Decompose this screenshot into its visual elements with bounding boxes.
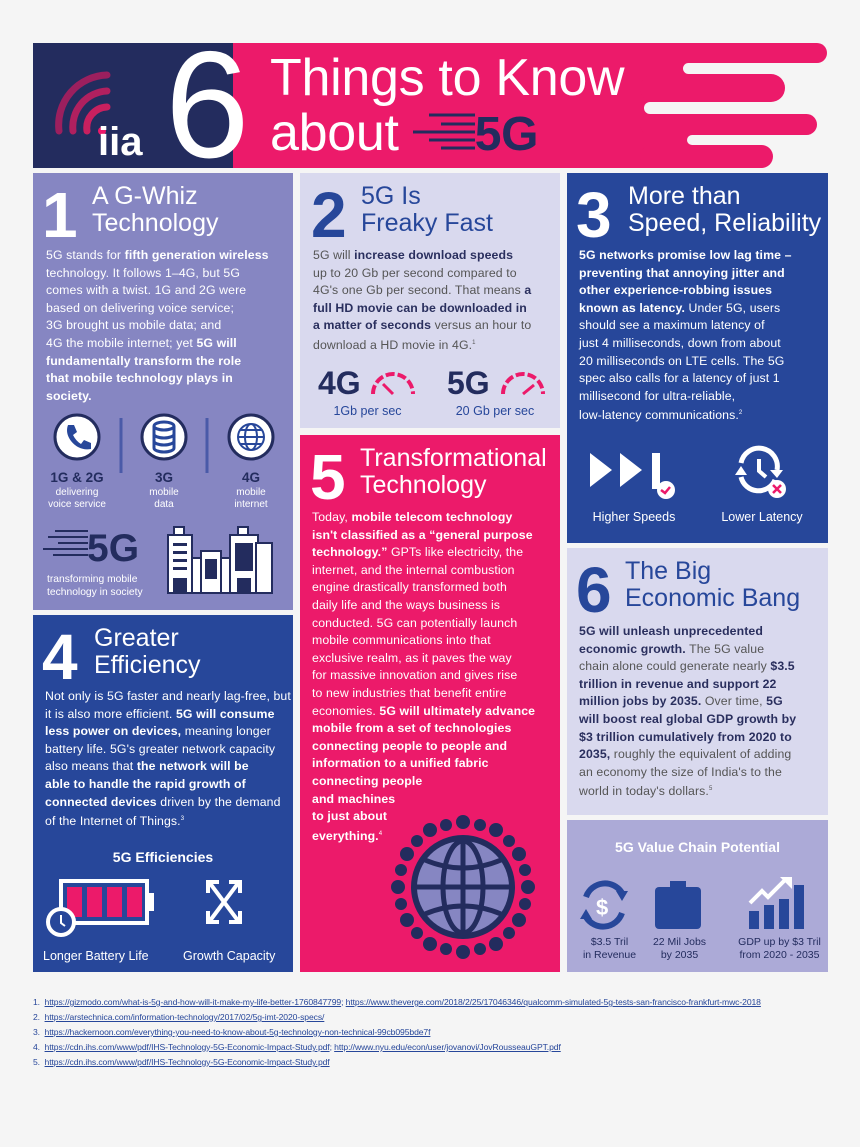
heading 2: 5G Is [361, 182, 421, 210]
heading 4: Efficiency [94, 651, 201, 679]
text block 2: 4G's one Gb per second. That means a [313, 283, 531, 297]
icon: globe with people [391, 815, 535, 959]
text block 3 [578, 248, 792, 422]
heading 6: 6 [576, 554, 612, 626]
heading 2: 2 [311, 179, 347, 251]
panel 4: Greater Efficiency [33, 615, 293, 972]
text block 3: should see a maximum latency of [579, 318, 765, 332]
heading 1: A G-Whiz [92, 182, 198, 210]
title: Things to Know [270, 49, 624, 107]
text block 2: full HD movie can be downloaded in [313, 301, 527, 315]
heading 2: Freaky Fast [361, 209, 493, 237]
footnotes: 3. https://hackernoon.com/everything-you-need-to-know-about-5g-technology-non-technical-99cb095bde7f [33, 1027, 430, 1037]
heading 3 [576, 179, 822, 251]
text block 5: daily life and the ways business is [312, 598, 500, 612]
text block 3: 20 milliseconds on LTE cells. The 5G [579, 354, 784, 368]
heading 6: The Big [625, 557, 711, 585]
value chain icons [580, 877, 821, 961]
icons row: generations: 3G [155, 470, 173, 485]
panel 5: Transformational [300, 435, 560, 972]
text block 3: preventing that annoying jitter and [579, 266, 785, 280]
icons row: generations: 4G [242, 470, 260, 485]
footnotes: 5. https://cdn.ihs.com/www/pdf/IHS-Technology-5G-Economic-Impact-Study.pdf [33, 1057, 330, 1067]
text block 5: technology.” GPTs like electricity, the [312, 545, 523, 559]
text block 6: chain alone could generate nearly $3.5 [579, 659, 795, 673]
text block 6: an economy the size of India's to the [579, 765, 782, 779]
speed gauges: 4G [318, 365, 361, 401]
5G transforming + city icon: 5G [87, 527, 139, 570]
text block 3: low-latency communications.2 [579, 408, 742, 422]
icons row: generations: data [154, 499, 174, 510]
text block 4: Not only is 5G faster and nearly lag-free, but [45, 689, 291, 703]
text block 6: economic growth. The 5G value [579, 642, 764, 656]
text block 5: mobile from a set of technologies [312, 721, 511, 735]
text block 4: battery life. 5G's greater network capacity [45, 742, 275, 756]
value chain icons: in Revenue [583, 949, 636, 961]
text block 5: mobile communications into that [312, 633, 491, 647]
text block 6: trillion in revenue and support 22 [579, 677, 776, 691]
heading 1 [42, 179, 218, 251]
title [270, 49, 625, 162]
speed gauges: 5G [447, 365, 490, 401]
icons row: generations: 1G & 2G [50, 470, 104, 485]
icons: higher speeds / lower latency: Higher Speeds [593, 510, 675, 524]
heading 4: 4 [42, 621, 78, 693]
icons row: generations: voice service [48, 499, 106, 510]
icons: higher speeds / lower latency [590, 446, 803, 524]
icons: battery & growth [43, 879, 276, 963]
text block 6: will boost real global GDP growth by [579, 712, 796, 726]
text block 5: everything.4 [312, 829, 382, 843]
text block 4: also means that the network will be [45, 759, 249, 773]
logo: iia wifi [55, 72, 143, 157]
text block 5: Today, mobile telecom technology [312, 510, 512, 524]
speed gauges [318, 365, 545, 418]
text block 5: economies. 5G will ultimately advance [312, 704, 535, 718]
heading 6 [576, 554, 800, 626]
text block 3: known as latency. Under 5G, users [579, 301, 780, 315]
heading 4 [42, 621, 201, 693]
heading 3: 3 [576, 179, 612, 251]
footnotes: 1. https://gizmodo.com/what-is-5g-and-how-will-it-make-my-life-better-1760847799; https://www.theverge.com/2018/2/25/17046346/qualcomm-simulated-5g-tests-san-francisco-frankfurt-mwc-2018 [33, 997, 761, 1007]
heading 3: Speed, Reliability [628, 209, 821, 237]
text block 1: comes with a twist. 1G and 2G were [46, 283, 246, 297]
text block 4: less power on devices, meaning longer [45, 724, 271, 738]
text block 2: download a HD movie in 4G.1 [313, 338, 476, 352]
heading 3: More than [628, 182, 741, 210]
icons: higher speeds / lower latency: Lower Latency [721, 510, 803, 524]
text block 5: exclusive realm, as it paves the way [312, 651, 512, 665]
panel: value chain [567, 820, 828, 972]
icons row: generations [48, 414, 274, 510]
heading 4: Greater [94, 624, 179, 652]
text block 3: just 4 milliseconds, down from about [579, 336, 781, 350]
text block 5: conducted. 5G can potentially launch [312, 616, 517, 630]
5G transforming + city icon [43, 526, 273, 598]
value chain icons: from 2020 - 2035 [740, 949, 819, 961]
text block 4: connected devices driven by the demand [45, 795, 281, 809]
text block 5: to just about [312, 809, 387, 823]
footnotes [33, 997, 761, 1067]
value chain icons: GDP up by $3 Tril [738, 936, 821, 948]
value chain heading: 5G Value Chain Potential [615, 839, 780, 855]
text block 1: that mobile technology plays in [46, 371, 233, 385]
text block 1: society. [46, 389, 92, 403]
text block 4 [45, 689, 291, 828]
big 6: 6 [165, 20, 246, 190]
text block 6: million jobs by 2035. Over time, 5G [579, 694, 783, 708]
panel 6: Economic Bang [567, 548, 828, 815]
text block 5: connecting people [312, 774, 422, 788]
icons row: generations: mobile [149, 487, 179, 498]
text block 5: engine drastically transformed both [312, 580, 507, 594]
text block 3: 5G networks promise low lag time – [579, 248, 792, 262]
text block 5 [312, 510, 535, 843]
text block 5: connecting people to people and [312, 739, 507, 753]
heading 5: Technology [360, 471, 486, 499]
text block 6: world in today's dollars.5 [579, 784, 712, 798]
value chain icons: $3.5 Tril [591, 936, 628, 948]
heading 2 [311, 179, 493, 251]
5G efficiencies heading: 5G Efficiencies [113, 849, 213, 865]
icons: battery & growth: Growth Capacity [183, 949, 275, 963]
text block 1: technology. It follows 1–4G, but 5G [46, 266, 240, 280]
text block 6 [579, 624, 796, 798]
heading 5 [310, 441, 547, 513]
text block 1: 3G brought us mobile data; and [46, 318, 221, 332]
5G transforming + city icon: technology in society [47, 586, 143, 598]
heading 5: 5 [310, 441, 346, 513]
icons row: generations: internet [234, 499, 268, 510]
text block 2: 5G will increase download speeds [313, 248, 513, 262]
text block 2: a matter of seconds versus an hour to [313, 318, 531, 332]
text block 5: internet, and the internal combustion [312, 563, 515, 577]
text block 5: for massive innovation and gives rise [312, 668, 517, 682]
speed gauges: 1Gb per sec [333, 404, 402, 418]
value chain icons: $ [596, 895, 608, 920]
text block 4: able to handle the rapid growth of [45, 777, 246, 791]
text block 1: 4G the mobile internet; yet 5G will [46, 336, 237, 350]
text block 5: to new industries that benefit entire [312, 686, 506, 700]
heading 6: Economic Bang [625, 584, 800, 612]
icons row: generations: mobile [236, 487, 266, 498]
footnotes: 4. https://cdn.ihs.com/www/pdf/IHS-Technology-5G-Economic-Impact-Study.pdf; http://www.nyu.edu/econ/user/jovanovi/JovRousseauGPT.pdf [33, 1042, 561, 1052]
text block 4: it is also more efficient. 5G will consume [45, 707, 275, 721]
panel 3: More than Speed [567, 173, 828, 543]
text block 1: based on delivering voice service; [46, 301, 234, 315]
icons row: generations: delivering [56, 487, 98, 498]
text block 1 [46, 248, 269, 403]
heading 5: Transformational [360, 444, 547, 472]
text block 2 [313, 248, 532, 352]
text block 1: fundamentally transform the role [46, 354, 241, 368]
text block 2: up to 20 Gb per second compared to [313, 266, 517, 280]
speed gauges: 20 Gb per sec [456, 404, 534, 418]
text block 6: 2035, roughly the equivalent of adding [579, 747, 791, 761]
header banner [33, 20, 827, 190]
icons: battery & growth: Longer Battery Life [43, 949, 149, 963]
text block 3: spec also calls for a latency of just 1 [579, 371, 780, 385]
heading 1: Technology [92, 209, 218, 237]
footnotes: 2. https://arstechnica.com/information-technology/2017/02/5g-imt-2020-specs/ [33, 1012, 324, 1022]
text block 1: 5G stands for fifth generation wireless [46, 248, 269, 262]
title: about 5G [270, 104, 538, 162]
value chain icons: by 2035 [661, 949, 698, 961]
text block 6: 5G will unleash unprecedented [579, 624, 763, 638]
5G transforming + city icon: transforming mobile [47, 574, 137, 585]
heading 1: 1 [42, 179, 78, 251]
text block 3: other experience-robbing issues [579, 283, 772, 297]
text block 3: millisecond for ultra-reliable, [579, 389, 735, 403]
text block 5: information to a unified fabric [312, 756, 489, 770]
text block 4: of the Internet of Things.3 [45, 814, 184, 828]
text block 5: isn't classified as a “general purpose [312, 528, 533, 542]
panel 2: Freaky Fast [300, 173, 560, 428]
text block 5: and machines [312, 792, 395, 806]
panel 1: G-Whiz [33, 173, 293, 610]
text block 6: $3 trillion cumulatively from 2020 to [579, 730, 792, 744]
value chain icons: 22 Mil Jobs [653, 936, 706, 948]
